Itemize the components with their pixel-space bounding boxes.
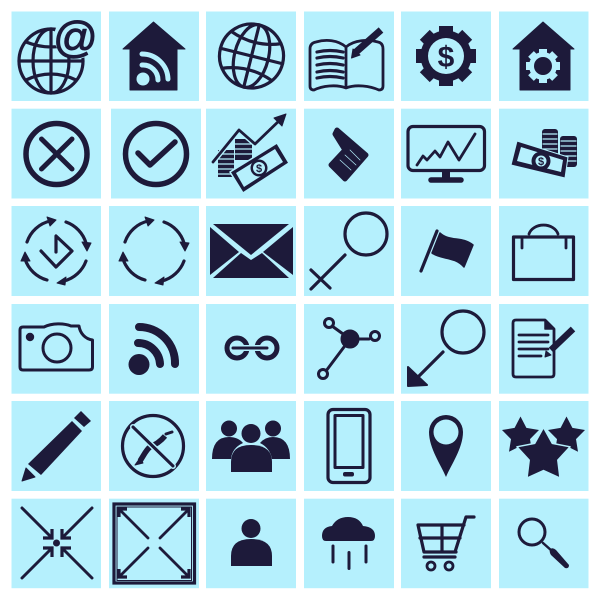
icon: globe: [213, 17, 290, 95]
icon: network nodes: [318, 318, 380, 378]
icon: globe with at sign: [19, 13, 98, 93]
icon: smartphone: [328, 410, 370, 482]
icon: house with rss: [123, 22, 185, 90]
icon: expand arrows in frame: [114, 504, 194, 583]
icon: chain link: [227, 338, 277, 358]
icon: globe with at sign: @: [53, 13, 98, 62]
icon: envelope: [210, 224, 293, 278]
icon: money and coin stacks: [511, 129, 577, 178]
icon: camera: [20, 324, 92, 370]
icon: money and growth arrow: [213, 114, 289, 193]
icon: rotating arrows with check: [21, 217, 91, 285]
icon: group of people: [212, 420, 290, 472]
icon: shopping cart: [418, 517, 474, 570]
icon: magnifying glass: [519, 519, 569, 568]
icon: prohibited sign: [122, 416, 184, 476]
icon: rain cloud: [322, 517, 375, 568]
icon: document with pen: [513, 320, 573, 377]
icon: shopping bag: [514, 225, 574, 280]
icon: pointing hand: [331, 130, 366, 179]
icon: circled check: [126, 124, 186, 184]
icon: rss feed: [128, 327, 175, 375]
icon: gear with dollar: $: [438, 41, 455, 74]
icon: map pin: [429, 415, 463, 477]
icon: monitor with line chart: [408, 126, 484, 180]
icon: rotating arrows: [119, 217, 189, 285]
icon: money and growth arrow: $: [256, 163, 262, 175]
icon: person: [231, 519, 272, 566]
icon: open book with pen: [310, 30, 383, 90]
icon: female symbol: [311, 213, 387, 289]
icon: three stars: [502, 416, 585, 478]
icon: compress arrows: [22, 508, 92, 578]
icon: circled cross: [26, 124, 87, 184]
icon: male symbol: [408, 311, 484, 386]
icon: money and coin stacks: $: [538, 156, 544, 168]
icon: gear with dollar: [416, 26, 476, 86]
icon: house with gear: [513, 22, 574, 90]
icon: pencil: [22, 411, 91, 481]
icon: flag: [421, 231, 473, 271]
